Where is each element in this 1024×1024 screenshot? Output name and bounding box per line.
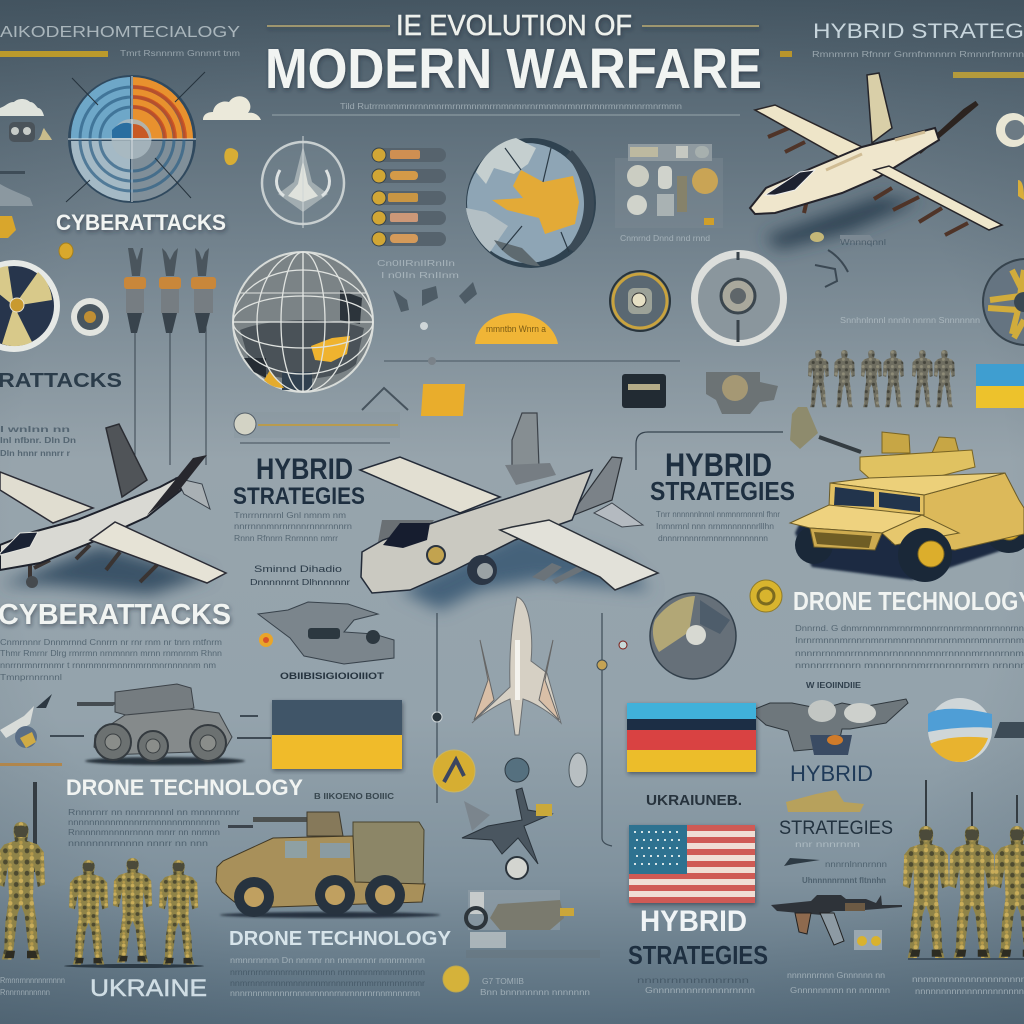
text block: small right: nnr nnnrnnn: [795, 840, 860, 849]
label: drone technology bottom: DRONE TECHNOLOGY: [229, 928, 452, 950]
top left heading: [0, 24, 240, 58]
text block: left small: I wnlnn nn: [0, 425, 70, 434]
top left heading: AIKODERHOMTECIALOGY: [0, 24, 240, 41]
text below pills: Cn0IIRnIIRnIIn: [377, 259, 455, 268]
text block: bottom centre: Bnn bnnnnnnnn nnnnnnn: [480, 988, 590, 997]
text block: rifle: [787, 971, 890, 995]
lower drone cluster: [462, 753, 587, 879]
text block: rifle: Gnnnnnnnnn nn nnnnnn: [790, 986, 890, 995]
text small left bottom: Rmnnrnnnnnnrnnnn: [0, 976, 65, 985]
small drone icon left: [0, 694, 62, 766]
heading: hybrid strategies bottom: [628, 905, 768, 970]
text small left bottom: Rnnrnnnnnnnn: [0, 988, 50, 997]
title subtitle: Tild Rutrrmnmmrnrnnmnrmrnrmnnmrrnmnmnrnrmnmnrmnrrnmnrmrnmnnrmnrmmn: [340, 102, 682, 111]
heading: hybrid strategies bottom: STRATEGIES: [628, 940, 768, 970]
vertical connector lines: [432, 613, 627, 846]
text block: hybrid right: Inmnrnnl nnn nrnmnnnnnnrlllhn: [656, 522, 774, 531]
grey armored vehicle: [50, 684, 271, 765]
small ring: [71, 298, 109, 336]
flag: ukraine: [272, 700, 402, 769]
text block: drone left: Rnnnrnrr nn nnrnrnnnnl nn mnnnrnnnr: [68, 808, 240, 817]
soldiers row top right: [808, 350, 955, 407]
gold ring dial: [610, 271, 670, 331]
label: cyberattacks large: CYBERATTACKS: [0, 599, 231, 631]
text block: small right: nnnrnlnnnrnnn: [825, 860, 887, 869]
text block: hybrid left: Sminnd Dihadio: [254, 564, 342, 574]
text block: drone left: nnnnnnnrnnnnn nnnrr nn nnn: [68, 839, 208, 848]
round ukraine dial: [928, 698, 1024, 762]
text block: hybrid left: [234, 511, 352, 587]
radar chart: [66, 72, 205, 203]
text block: small right: Uhnnnnnrnnnt fltnnhn: [802, 876, 886, 885]
heading: hybrid strategies right: STRATEGIES: [650, 476, 795, 506]
flag: striped: [627, 703, 756, 772]
text block: rifle: nnnnnnrnnn Gnnnnnn nn: [787, 971, 885, 980]
text block: hybrid bottom: Gnnnnnnnnrnnnnnrnnnn: [645, 986, 755, 995]
text below pills: [377, 259, 460, 280]
text block: drone right: W IEOIINDIIE: [806, 681, 862, 690]
text block: drone bottom: nrnnrnrnnmnnrnnnrnmnrnn nrnnnnrnmnnnrnnnrnn: [230, 968, 425, 977]
heading: hybrid strategies right: HYBRID: [665, 447, 772, 483]
upper right detail text: Snnhnlnnnl nnnln nnrnn Snnnnnnn: [840, 316, 980, 325]
text block: hybrid left: Tmrrnrnnrnl Gnl nmnm nm: [234, 511, 346, 520]
text block: hybrid right: Tnrr nnnnnnlnnnl nnmnnrnnnrnl fhnr: [656, 510, 780, 519]
text block: hybrid left: nnrrnnnmnrnrnnnrnnnrnnnrn: [234, 522, 352, 531]
caption below device: OBIIBISIGIOIOIIIOT: [280, 671, 385, 681]
gold coin: [750, 580, 782, 612]
text block: drone bottom: [230, 956, 425, 998]
drone left middle: [0, 424, 226, 595]
cloud right: [203, 96, 261, 120]
text block: hybrid left: Rnnn Rfnnrn Rnrnnnn nmrr: [234, 534, 338, 543]
flag: usa: [629, 825, 755, 903]
black badge: [622, 374, 666, 408]
heading: hybrid strategies left: [233, 453, 365, 510]
top left heading: Tmrt Rsnnnrm Gnnmrt tnm: [120, 49, 240, 58]
text block: cyberattacks: Thmr Rmrnr Dlrg rmrrmn nrnmnnrn mrnn rnmnrnm Rhnn: [0, 649, 222, 658]
heading: hybrid strategies left: STRATEGIES: [233, 483, 365, 510]
rocket: [472, 597, 561, 735]
title: IE EVOLUTION OF: [396, 10, 632, 42]
humvee: [790, 407, 1024, 582]
text block: left small: Dln hnnr nnnrr r: [0, 449, 70, 458]
bottom device: [466, 890, 600, 958]
top right heading: [780, 20, 1024, 78]
left column icons: [0, 122, 52, 238]
text block: soldiers right: nnnnnnnnnnnnnnnnnnnnn: [915, 987, 1024, 996]
text block: drone right: [795, 624, 1024, 690]
text block: drone left: nnnnnnnnnmnnnrnrnnnnnnmnnnrnn: [68, 818, 220, 827]
helmet device: [706, 372, 778, 414]
text block: cyberattacks: [0, 638, 222, 682]
small gold badge: [59, 243, 73, 259]
heading: hybrid strategies left: HYBRID: [256, 453, 353, 486]
small mechanical device: [258, 602, 394, 664]
text block: hybrid bottom: nnnnrnnnnnnnrnnn: [637, 976, 749, 985]
text block: hybrid right: [656, 510, 780, 543]
upper right detail text: Wnnnqnnl: [840, 238, 886, 247]
drone centre: [360, 413, 658, 610]
chrome ring dial: [691, 250, 787, 346]
flag corner right: [976, 364, 1024, 408]
gold medal centre: [433, 750, 475, 792]
text below pills: I n0IIn RnIInm: [381, 271, 460, 280]
heading: hybrid strategies right: [636, 432, 795, 506]
wheel emblem right: [983, 259, 1024, 345]
title: [265, 10, 762, 101]
yellow dome tag: mmntbn Wnrn a: [486, 324, 546, 334]
label: drone technology left: DRONE TECHNOLOGY: [66, 775, 303, 800]
text block: hybrid right: dnnnrnnnnrnrnnnrnnnnnnnnn: [658, 534, 768, 543]
text block: soldiers right: [912, 975, 1024, 996]
text block: hybrid bottom: [637, 976, 755, 995]
three soldiers: [64, 858, 204, 968]
three hanging devices: [124, 248, 216, 465]
gold coin bottom: [443, 966, 469, 992]
top right heading: Rmnmrnn Rfnnrr Gnrnfnmnnrn Rmnnrfnmrnn: [812, 50, 1024, 59]
label: cyberattacks top: CYBERATTACKS: [56, 210, 226, 235]
label: ukraine: UKRAINE: [90, 975, 207, 1002]
text small left bottom: [0, 976, 65, 997]
label: rattacks: RATTACKS: [0, 370, 122, 392]
text block: cyberattacks: nnrrnrmnrrnnmr t rnnrnmnrmnnrnmrnmnrnnnnnm nm: [0, 661, 216, 670]
top right heading: HYBRID STRATEGIES: [813, 20, 1024, 43]
small icons under globe: [362, 282, 680, 416]
small yellow goggles: [854, 930, 882, 950]
upper right detail text: [810, 232, 980, 325]
text block: soldiers right: nnnnnnrnnnnnnnnnnnnnr: [912, 975, 1024, 984]
globe: football star: [466, 138, 596, 268]
fan emblem: [0, 260, 60, 352]
globe: wireframe map: [233, 252, 373, 392]
text block: drone left: B IIKOENO BOIIIC: [314, 792, 394, 801]
yellow tag: [224, 148, 238, 165]
heading: hybrid strategies bottom: HYBRID: [640, 905, 747, 938]
text block: bottom centre: G7 TOMIIB: [482, 977, 524, 986]
text block: left small: Inl nfbnr. Dln Dn: [0, 436, 76, 445]
text block: small right: [784, 840, 887, 885]
yellow dome tag: [475, 313, 558, 344]
progress pill list: [372, 148, 446, 246]
small gold strip: [786, 790, 864, 812]
connector key strip: [234, 412, 400, 443]
ring top right: [996, 113, 1024, 200]
ball map: [650, 593, 736, 679]
title: MODERN WARFARE: [265, 37, 762, 101]
text block: drone right: Dnnrnd. G dnmrnmnrnmrnnrmnnnrrnnrnrmnnrnrnnnrnn: [795, 624, 1024, 633]
drone gimbal icon: [750, 699, 908, 755]
label: hybrid small: HYBRID: [790, 761, 873, 786]
cloud left: [0, 99, 44, 116]
text block: drone right: nmnnrrrnnnrn mnnnrnnrnmrrnnrnnrnmrn nrnnnr: [795, 661, 1024, 670]
text block: cyberattacks: Cnmrnnnr Dnnmrnnd Cnnrrn nr rnr rnm nr tnrn rntfnrm: [0, 638, 222, 647]
three soldiers right: [903, 780, 1024, 959]
label: ukraine garbled: UKRAIUNEB.: [646, 792, 742, 809]
text block: left small: [0, 425, 76, 458]
text block: drone right: nnnrnrnnmnrrnnmnnrnnnnnnmnrrnnnnmrnnnrnnm: [795, 649, 1024, 658]
emblem: [262, 136, 344, 228]
label: strategies small: STRATEGIES: [779, 818, 893, 839]
text block: cyberattacks: Tmnprnnrnnnl: [0, 673, 62, 682]
drone top right: [750, 73, 1002, 249]
icon grid panel: Cnmrnd Dnnd nnd rnnd: [620, 234, 710, 243]
text block: drone right: Inrnrmnnnmrnnrnmnrnmnrnnnmrnnrnmnrnmnnrrnnm: [795, 636, 1024, 645]
text block: drone bottom: nnmrnnnrrnnnmnnnrnnmrnnnrnrnnmrnnrnnnrnnnr: [230, 979, 425, 988]
text block: drone bottom: nmnnrnrnnn Dn nnrnnr nn nmnnrnnr nmnrnnnnn: [230, 956, 425, 965]
text block: drone left: Rnnnnnmnnnnrnnnn mnrr nn nnmnn: [68, 828, 220, 837]
text block: drone bottom: nnnrnnnmnnnnrnnnnmnnnrnnrnnnrnrnnmnnnrnn: [230, 989, 420, 998]
text block: bottom centre: [480, 977, 590, 997]
text block: drone left: [68, 792, 394, 848]
icon grid panel: [615, 144, 723, 243]
rifle: [771, 895, 902, 945]
text block: hybrid left: Dnnnnnrnt Dlhnnnnnr: [250, 578, 350, 587]
soldier left large: [0, 782, 45, 960]
tan armored vehicle: [216, 812, 440, 918]
